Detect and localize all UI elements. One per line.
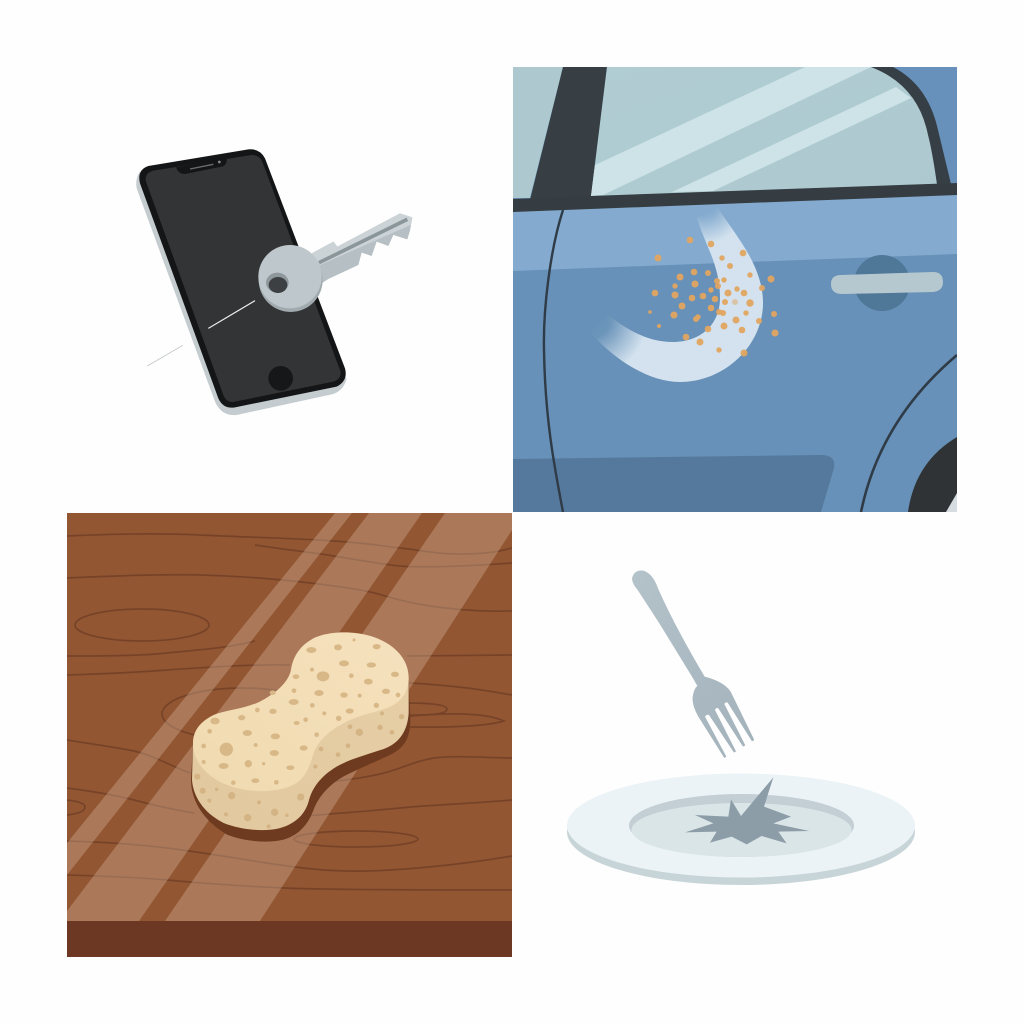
panel: wooden table with sponge [67,513,512,957]
pillar [530,67,607,200]
icon: phone [136,149,347,415]
door seam [544,210,563,512]
window [591,67,957,196]
wheel arch [861,355,957,512]
scratch swirl [590,208,763,382]
sponge side pores [194,711,404,828]
icon: sponge [191,632,410,842]
door handle [831,255,943,311]
icon: plate [567,774,915,885]
rear glass [513,67,563,198]
panel: phone scratched by key [136,149,412,415]
scratch beside phone [147,345,183,366]
icon: fork [632,570,754,758]
icon: crack [685,777,809,844]
wood grain [67,534,512,890]
rust specks [648,237,778,356]
sponge pores [201,638,400,785]
table edge [67,921,512,957]
icon: key [258,213,412,312]
scratch on screen [208,301,255,328]
window sill [513,183,957,212]
sponge body [191,632,410,842]
panel: car door scratch [513,67,957,512]
lower door panel [513,455,834,512]
gouges [67,513,512,921]
panel: fork and chipped plate [567,570,915,885]
door upper band [513,190,957,271]
